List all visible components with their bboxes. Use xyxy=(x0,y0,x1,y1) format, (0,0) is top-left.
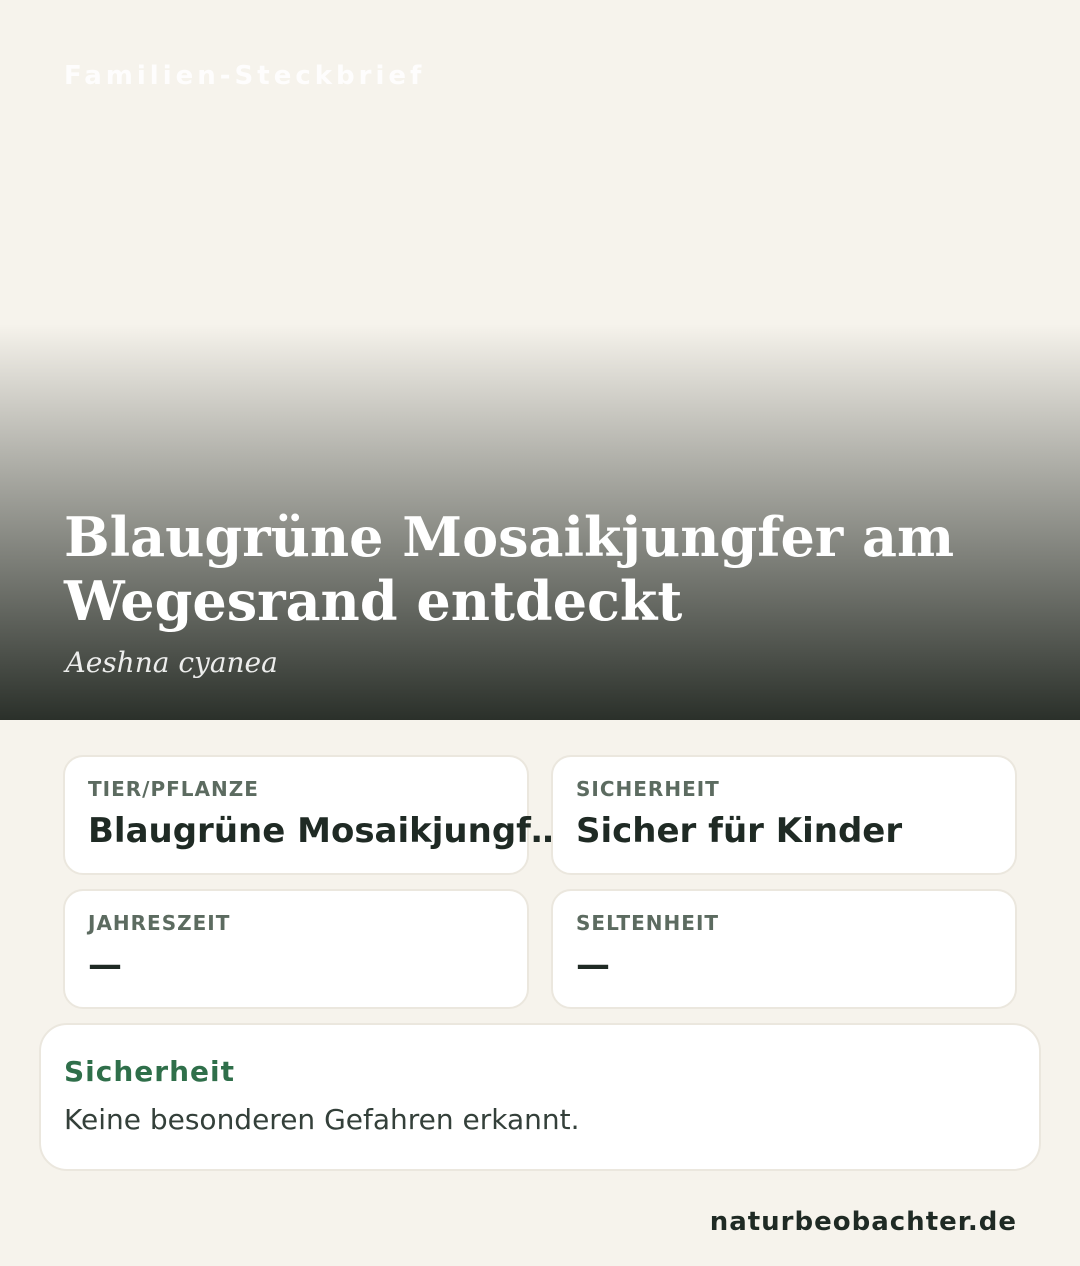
card label: Jahreszeit: JAHRESZEIT xyxy=(88,911,230,935)
card label: Tier/Pflanze: TIER/PFLANZE xyxy=(88,777,259,801)
eyebrow label: Familien-Steckbrief xyxy=(64,61,425,91)
card: Seltenheit xyxy=(551,889,1017,1009)
hero gradient panel xyxy=(0,0,1080,720)
card label: Seltenheit: SELTENHEIT xyxy=(576,911,719,935)
panel: safety note xyxy=(39,1023,1041,1171)
safety text: Keine besonderen Gefahren erkannt. xyxy=(64,1103,580,1136)
scientific name: Aeshna cyanea xyxy=(66,646,278,679)
card: Tier/Pflanze xyxy=(63,755,529,875)
card label: Sicherheit: SICHERHEIT xyxy=(576,777,720,801)
title xyxy=(64,505,954,633)
safety heading: Sicherheit xyxy=(64,1055,235,1088)
card: Sicherheit xyxy=(551,755,1017,875)
footer source: naturbeobachter.de xyxy=(710,1207,1017,1237)
card value: Sicherheit: Sicher für Kinder xyxy=(576,811,902,851)
card: Jahreszeit xyxy=(63,889,529,1009)
title: Blaugrüne Mosaikjungfer am xyxy=(64,505,954,569)
title: Wegesrand entdeckt xyxy=(64,569,682,633)
card value: Jahreszeit: — xyxy=(88,945,122,985)
card value: Seltenheit: — xyxy=(576,945,610,985)
card value: Tier/Pflanze: Blaugrüne Mosaikjungf… xyxy=(88,811,553,851)
